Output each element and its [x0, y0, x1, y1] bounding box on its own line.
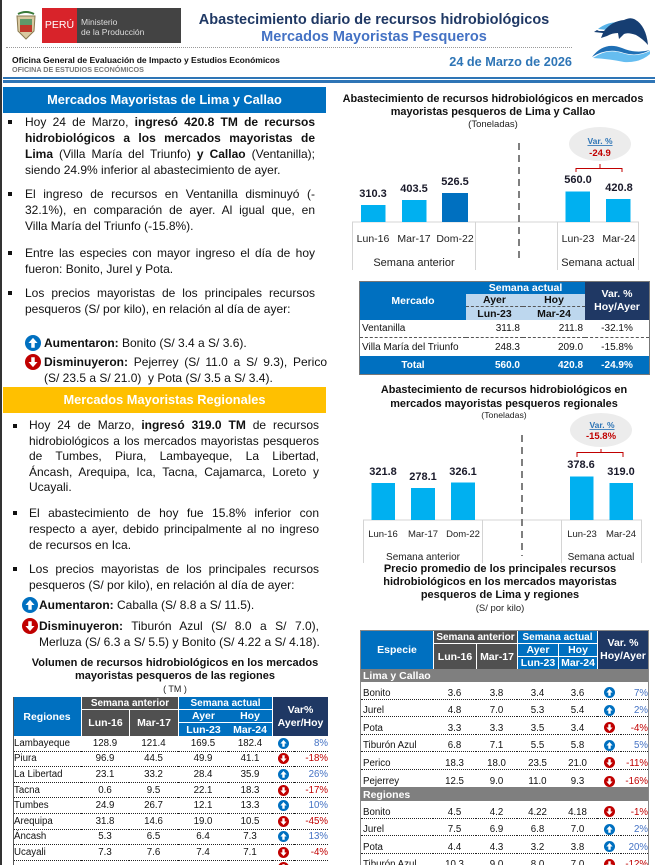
paragraph: ingreso regional [29, 418, 319, 494]
table: precio promedio: Lun-23 [521, 657, 555, 669]
paragraph: ingreso: hidrobiológicos a los mercados mayoristas de [25, 131, 315, 145]
table: precio promedio: 3.6 [571, 688, 584, 698]
paragraph: Ventanilla [25, 187, 315, 233]
table: mercados Lima y Callao [359, 281, 650, 375]
text: disminuyeron: Disminuyeron: Tiburón Azul (S/ 8.0 a S/ 7.0), [39, 619, 319, 633]
table: precio promedio: 3.8 [571, 842, 584, 852]
table: precio promedio: Ayer [527, 644, 549, 656]
table: precio promedio: 5.3 [531, 705, 544, 716]
table: precio promedio: 3.5 [531, 722, 544, 734]
paragraph: ingreso regional: de Tumbes, Piura, Lambayeque, La Libertad, [29, 449, 319, 463]
table: precio promedio: Pota [363, 722, 383, 734]
axis labels: Lun-16 [357, 233, 390, 245]
office names [12, 55, 280, 74]
table: volumen por regiones: 8% [314, 738, 328, 749]
chart: regionales [363, 413, 642, 563]
table: precio promedio: Mar-17 [480, 650, 514, 662]
table: precio promedio: 7.0 [571, 824, 584, 835]
heading: volumen regiones: mayoristas pesqueros de las regiones [75, 670, 275, 682]
table: precio promedio: Lun-16 [438, 650, 472, 662]
table: volumen por regiones: 35.9 [241, 769, 259, 780]
value labels: 560.0 [564, 174, 592, 186]
table: precio promedio: -4% [631, 722, 648, 734]
table: precio promedio: Var. % [608, 637, 638, 649]
paragraph: precios: pesqueros (S/ por kilo), en relación al día de ayer: [29, 578, 294, 592]
table: precio promedio: Jurel [363, 824, 384, 835]
table: precio promedio: 2% [634, 705, 648, 716]
heading: volumen regiones: Volumen de recursos hidrobiológicos en los mercados [32, 657, 318, 669]
icon: national coat of arms [16, 11, 36, 40]
logo: Ministerio de la Producción [77, 8, 181, 43]
table: mercados Lima y Callao: -15.8% [601, 342, 633, 352]
table: volumen por regiones: La Libertad [14, 769, 62, 780]
text: disminuyeron: Merluza (S/ 6.3 a S/ 5.5) y Bonito (S/ 4.22 a S/ 4.18). [39, 635, 320, 649]
table: precio promedio: Bonito [363, 806, 390, 818]
paragraph: Ventanilla: 32.1%), en comparación de ayer. Al igual que, en [25, 203, 315, 217]
table: volumen por regiones: 33.2 [144, 769, 163, 780]
heading: precio promedio: pesqueros de Lima y regiones [421, 589, 579, 601]
table: precio promedio: Pota [363, 842, 383, 852]
logo: PERÚ [42, 8, 77, 43]
value labels: 378.6 [567, 459, 595, 471]
table: precio promedio: Lima y Callao [363, 670, 431, 682]
table: volumen por regiones: Ucayali [14, 847, 46, 858]
table: mercados Lima y Callao: -24.9% [601, 360, 633, 370]
table: precio promedio: 11.0 [528, 776, 547, 787]
icon: down arrow [25, 354, 41, 370]
table: precio promedio: 4.18 [568, 806, 587, 818]
axis labels: Mar-24 [606, 529, 636, 540]
table: volumen por regiones: 9.5 [147, 785, 160, 796]
paragraph: ingreso: siendo 24.9% inferior al abastecimiento de ayer. [25, 163, 280, 177]
paragraph: ingreso: Hoy 24 de Marzo, ingresó 420.8 TM de recursos [25, 115, 315, 129]
table: mercados Lima y Callao: Semana actual [489, 282, 562, 294]
table: precio promedio: Tiburón Azul [363, 740, 416, 751]
text: disminuyeron [39, 619, 320, 649]
table: volumen por regiones: -4% [311, 847, 328, 858]
table: volumen por regiones: 7.6 [147, 847, 160, 858]
axis labels: Semana actual [561, 257, 635, 269]
table: mercados Lima y Callao: 209.0 [558, 342, 583, 352]
icon: clipped down arrow [278, 862, 288, 865]
panel heading: Lima y Callao [3, 87, 326, 113]
table: precio promedio: 5.5 [531, 740, 544, 751]
callout: variación: Var. % [589, 420, 615, 430]
value labels: 326.1 [449, 466, 477, 478]
table: precio promedio: 4.5 [448, 806, 461, 818]
table: precio promedio: 3.3 [448, 722, 461, 734]
table: precio promedio: 7.1 [490, 740, 503, 751]
axis labels: Mar-24 [602, 233, 636, 245]
value labels: 321.8 [369, 466, 397, 478]
table: volumen por regiones: Semana actual [190, 698, 261, 708]
paragraph: ingreso [25, 115, 315, 177]
table: precio promedio: Jurel [363, 705, 384, 716]
paragraph: ingreso regional: Ucayali. [29, 480, 72, 494]
table: volumen por regiones: Tumbes [14, 800, 49, 811]
table: volumen por regiones: 7.3 [98, 847, 112, 858]
table: volumen por regiones: -18% [305, 753, 328, 764]
paragraph: especies [25, 246, 315, 276]
logo: PERÚ: PERÚ [45, 19, 74, 31]
bars [372, 476, 633, 520]
heading: volumen regiones [32, 657, 318, 694]
table: volumen por regiones: 6.4 [196, 831, 210, 842]
table: volumen por regiones: 26% [309, 769, 328, 780]
table: volumen por regiones: 7.3 [243, 831, 257, 842]
table: volumen por regiones: 19.0 [194, 816, 212, 827]
heading: abastecimiento regionales: (Toneladas) [481, 410, 527, 420]
date: 24 de Marzo de 2026 [449, 55, 572, 69]
panel heading: Regionales: Mercados Mayoristas Regionales [64, 392, 265, 407]
heading: abastecimiento regionales: mercados mayoristas pesqueros regionales [390, 398, 618, 410]
title: Abastecimiento diario de recursos hidrobiológicos [199, 12, 549, 28]
table: precio promedio: Pejerrey [363, 776, 399, 787]
table: volumen por regiones: 6.5 [147, 831, 160, 842]
paragraph: precios: Los precios mayoristas de los principales recursos [29, 562, 319, 576]
heading: abastecimiento regionales [381, 384, 627, 420]
heading: abastecimiento Lima y Callao: mayoristas pesqueros de Lima y Callao [391, 106, 595, 118]
paragraph: ingreso: Lima (Villa María del Triunfo) y Callao (Ventanilla); [25, 147, 315, 161]
table: volumen por regiones: 13% [309, 831, 328, 842]
table: volumen por regiones: 96.9 [96, 753, 114, 764]
table: precio promedio: Regiones [363, 789, 410, 801]
heading: abastecimiento Lima y Callao: Abastecimiento de recursos hidrobiológicos en mercados [343, 93, 643, 105]
paragraph: precios [25, 286, 315, 316]
table: mercados Lima y Callao: 420.8 [558, 360, 583, 370]
table: precio promedio: -16% [625, 776, 648, 787]
paragraph: abastecimiento [29, 506, 319, 552]
table: volumen por regiones: 22.1 [194, 785, 212, 796]
axis labels: Mar-17 [408, 529, 438, 540]
table: mercados Lima y Callao: Ventanilla [362, 323, 405, 334]
table: precio promedio: 3.3 [490, 722, 503, 734]
table: precio promedio: 23.5 [528, 758, 547, 768]
axis labels: Lun-23 [567, 529, 597, 540]
table: volumen por regiones: 121.4 [141, 738, 166, 749]
axis labels [368, 529, 636, 563]
table: volumen por regiones: 128.9 [93, 738, 117, 749]
paragraph: Ventanilla: Villa María del Triunfo (-15.8%). [25, 219, 194, 233]
table: precio promedio: 18.0 [487, 758, 506, 768]
value labels [369, 459, 635, 483]
table: volumen por regiones: 23.1 [96, 769, 114, 780]
icon: fish logo [592, 18, 650, 62]
paragraph: Ventanilla: El ingreso de recursos en Ventanilla disminuyó (- [25, 187, 315, 201]
table: precio promedio: 3.4 [531, 688, 544, 698]
office names: Oficina General de Evaluación de Impacto y Estudios Económicos [12, 55, 280, 65]
table: volumen por regiones: 44.5 [144, 753, 163, 764]
axis labels: Semana anterior [386, 552, 461, 563]
table: volumen por regiones: 13.3 [241, 800, 259, 811]
table: volumen por regiones: Arequipa [14, 816, 53, 827]
table: precio promedio: Especie [377, 644, 417, 656]
table: precio promedio: Mar-24 [561, 657, 595, 669]
table: precio promedio: -11% [626, 758, 648, 768]
table: volumen por regiones [14, 697, 328, 861]
table: volumen por regiones: 14.6 [144, 816, 163, 827]
table: precio promedio: 4.8 [448, 705, 461, 716]
text: aumentaron: Aumentaron: Caballa (S/ 8.8 a S/ 11.5). [39, 598, 254, 612]
heading: precio promedio: Precio promedio de los principales recursos [384, 563, 616, 575]
text: disminuyeron: Disminuyeron: Pejerrey (S/ 11.0 a S/ 9.3), Perico [44, 355, 327, 369]
heading: volumen regiones: ( TM ) [163, 684, 187, 694]
table: volumen por regiones: 5.3 [98, 831, 112, 842]
axis labels [357, 233, 636, 269]
value labels: 526.5 [441, 176, 469, 188]
table: precio promedio: Hoy/Ayer [600, 650, 646, 662]
heading: precio promedio: hidrobiológicos en los mercados mayoristas [383, 576, 617, 588]
table: precio promedio: 4.3 [490, 842, 503, 852]
logo: Ministerio de la Producción: de la Producción [81, 27, 144, 37]
table: mercados Lima y Callao: Hoy/Ayer [594, 301, 640, 313]
table: volumen por regiones: 10.5 [241, 816, 259, 827]
table: volumen por regiones: Lun-23 [186, 724, 221, 736]
panel heading: Regionales [3, 387, 326, 413]
table: precio promedio: 3.6 [448, 688, 461, 698]
table: precio promedio [360, 630, 649, 865]
table: mercados Lima y Callao: Ayer [483, 294, 506, 306]
office names: OFICINA DE ESTUDIOS ECONÓMICOS [12, 65, 144, 74]
table: mercados Lima y Callao: Total [401, 360, 425, 370]
table: volumen por regiones: Mar-24 [233, 724, 267, 736]
table: precio promedio: 6.8 [531, 824, 544, 835]
table: precio promedio: Semana anterior [436, 632, 515, 642]
table: volumen por regiones: Mar-17 [137, 717, 171, 729]
table: mercados Lima y Callao: -32.1% [601, 323, 633, 334]
table: volumen por regiones: 12.1 [194, 800, 212, 811]
paragraph: especies: Entre las especies con mayor ingreso el día de hoy [25, 246, 315, 260]
table: volumen por regiones: Ayer [192, 710, 215, 722]
axis labels: Lun-23 [562, 233, 595, 245]
title [199, 12, 549, 45]
value labels: 403.5 [400, 183, 428, 195]
table: mercados Lima y Callao: Mercado [391, 295, 435, 307]
table: volumen por regiones: 28.4 [194, 769, 212, 780]
text block: regional bullets [13, 418, 320, 649]
table: volumen por regiones: 26.7 [144, 800, 163, 811]
icon: down arrow [22, 618, 38, 634]
table: mercados Lima y Callao: 248.3 [495, 342, 520, 352]
heading: abastecimiento Lima y Callao [342, 93, 643, 130]
table: precio promedio: 12.5 [445, 776, 464, 787]
table: precio promedio: 5.4 [571, 705, 584, 716]
table: volumen por regiones: Lun-16 [88, 717, 123, 729]
table: precio promedio: 6.8 [448, 740, 461, 751]
heading: abastecimiento Lima y Callao: (Toneladas) [468, 119, 518, 130]
table: precio promedio: 6.9 [490, 824, 503, 835]
table: mercados Lima y Callao: Lun-23 [477, 308, 512, 320]
table: volumen por regiones: Hoy [240, 710, 260, 722]
table: precio promedio: 7.5 [448, 824, 461, 835]
table: volumen por regiones: 7.4 [196, 847, 210, 858]
table: precio promedio: 21.0 [568, 758, 587, 768]
text: disminuyeron: (S/ 23.5 a S/ 21.0) y Pota (S/ 3.5 a S/ 3.4). [44, 371, 273, 385]
icon: up arrow [25, 335, 41, 351]
header logos [16, 8, 181, 43]
paragraph: abastecimiento: El abastecimiento de hoy fue 15.8% inferior con [29, 506, 319, 520]
table: volumen por regiones: 7.1 [243, 847, 257, 858]
table: precio promedio: 20% [629, 842, 648, 852]
table: mercados Lima y Callao: Villa María del Triunfo [362, 342, 459, 352]
table: volumen por regiones: Piura [14, 753, 37, 764]
paragraph: abastecimiento: respecto a ayer, debido principalmente al no ingreso [29, 522, 319, 536]
table: precio promedio: 7.0 [490, 705, 503, 716]
bars [361, 192, 630, 222]
paragraph: ingreso regional: Áncash, Arequipa, Ica, Tacna, Cajamarca, Loreto y [29, 464, 319, 478]
table: precio promedio: 3.4 [571, 722, 584, 734]
text: disminuyeron [44, 355, 327, 385]
table: precio promedio: Hoy [568, 644, 588, 656]
table: precio promedio: 5% [634, 740, 648, 751]
callout: variación [569, 127, 631, 172]
heading: abastecimiento regionales: Abastecimiento de recursos hidrobiológicos en [381, 384, 627, 396]
table: precio promedio: 9.0 [490, 776, 503, 787]
axis labels: Lun-16 [368, 529, 398, 540]
chart: Lima y Callao [352, 127, 639, 270]
table: mercados Lima y Callao: 560.0 [495, 360, 520, 370]
axis labels: Semana actual [568, 552, 634, 563]
double rule [3, 77, 655, 83]
table: mercados Lima y Callao: Var. % [602, 288, 632, 300]
table: volumen por regiones: Áncash [14, 831, 46, 842]
table: precio promedio: Perico [363, 758, 390, 768]
table: volumen por regiones: 0.6 [98, 785, 112, 796]
paragraph: especies: fueron: Bonito, Jurel y Pota. [25, 262, 173, 276]
value labels: 278.1 [409, 471, 437, 483]
table: precio promedio: 2% [634, 824, 648, 835]
paragraph: precios: Los precios mayoristas de los principales recursos [25, 286, 315, 300]
text block: Lima y Callao bullets [8, 115, 327, 385]
callout: variación: -15.8% [586, 431, 617, 442]
table: precio promedio: 18.3 [445, 758, 464, 768]
axis labels: Dom-22 [446, 529, 480, 540]
icon: up arrow [22, 597, 38, 613]
table: volumen por regiones: 169.5 [191, 738, 215, 749]
table: volumen por regiones: 31.8 [96, 816, 114, 827]
table: volumen por regiones: Semana anterior [91, 698, 169, 708]
table: volumen por regiones: 18.3 [241, 785, 259, 796]
table: precio promedio: 4.22 [528, 806, 547, 818]
callout: variación [570, 413, 632, 457]
paragraph: ingreso regional: hidrobiológicos a los mercados mayoristas pesqueros [29, 434, 319, 448]
table: precio promedio: 4.2 [490, 806, 503, 818]
table: volumen por regiones: 41.1 [241, 753, 259, 764]
paragraph: precios: pesqueros (S/ por kilo), en relación al día de ayer: [25, 302, 290, 316]
title: Mercados Mayoristas Pesqueros [261, 29, 487, 45]
table: mercados Lima y Callao: 311.8 [496, 323, 520, 334]
table: volumen por regiones: Regiones [23, 710, 71, 722]
table: mercados Lima y Callao: Hoy [544, 294, 564, 306]
paragraph: ingreso regional: Hoy 24 de Marzo, ingresó 319.0 TM de recursos [29, 418, 319, 432]
table: volumen por regiones: 24.9 [96, 800, 114, 811]
value labels: 319.0 [607, 466, 635, 478]
axis labels: Dom-22 [436, 233, 474, 245]
panel heading: Lima y Callao: Mercados Mayoristas de Lima y Callao [47, 92, 282, 107]
callout: variación: -24.9 [589, 148, 611, 159]
table: volumen por regiones: -45% [305, 816, 328, 827]
table: precio promedio: 3.8 [490, 688, 503, 698]
axis labels: Mar-17 [397, 233, 431, 245]
table: precio promedio: -1% [631, 806, 648, 818]
table: mercados Lima y Callao: Mar-24 [537, 308, 571, 320]
logo: Ministerio de la Producción: Ministerio [81, 17, 117, 27]
paragraph: abastecimiento: de recursos en Ica. [29, 538, 131, 552]
table: volumen por regiones: 10% [309, 800, 328, 811]
table: precio promedio: Bonito [363, 688, 390, 698]
table: precio promedio: 9.3 [571, 776, 584, 787]
value labels: 310.3 [359, 188, 387, 200]
table: mercados Lima y Callao: 211.8 [559, 323, 583, 334]
table: precio promedio: 7% [634, 688, 648, 698]
heading: precio promedio: (S/ por kilo) [476, 603, 524, 614]
table: volumen por regiones: Ayer/Hoy [278, 716, 323, 728]
value labels [359, 174, 633, 200]
value labels: 420.8 [605, 182, 633, 194]
text: aumentaron: Aumentaron: Bonito (S/ 3.4 a S/ 3.6). [44, 336, 247, 350]
table: volumen por regiones: Var% [288, 704, 313, 716]
table: precio promedio: 4.4 [448, 842, 461, 852]
table: volumen por regiones: -17% [305, 785, 328, 796]
paragraph: precios [29, 562, 319, 592]
table: volumen por regiones: 182.4 [238, 738, 262, 749]
axis labels: Semana anterior [373, 257, 455, 269]
table: precio promedio: 3.2 [531, 842, 544, 852]
heading: precio promedio [383, 563, 617, 614]
table: precio promedio: Semana actual [522, 632, 593, 642]
callout: variación: Var. % [587, 136, 613, 146]
table: volumen por regiones: Tacna [14, 785, 40, 796]
table: precio promedio: 5.8 [571, 740, 584, 751]
table: volumen por regiones: 49.9 [194, 753, 212, 764]
table: volumen por regiones: Lambayeque [14, 738, 70, 749]
